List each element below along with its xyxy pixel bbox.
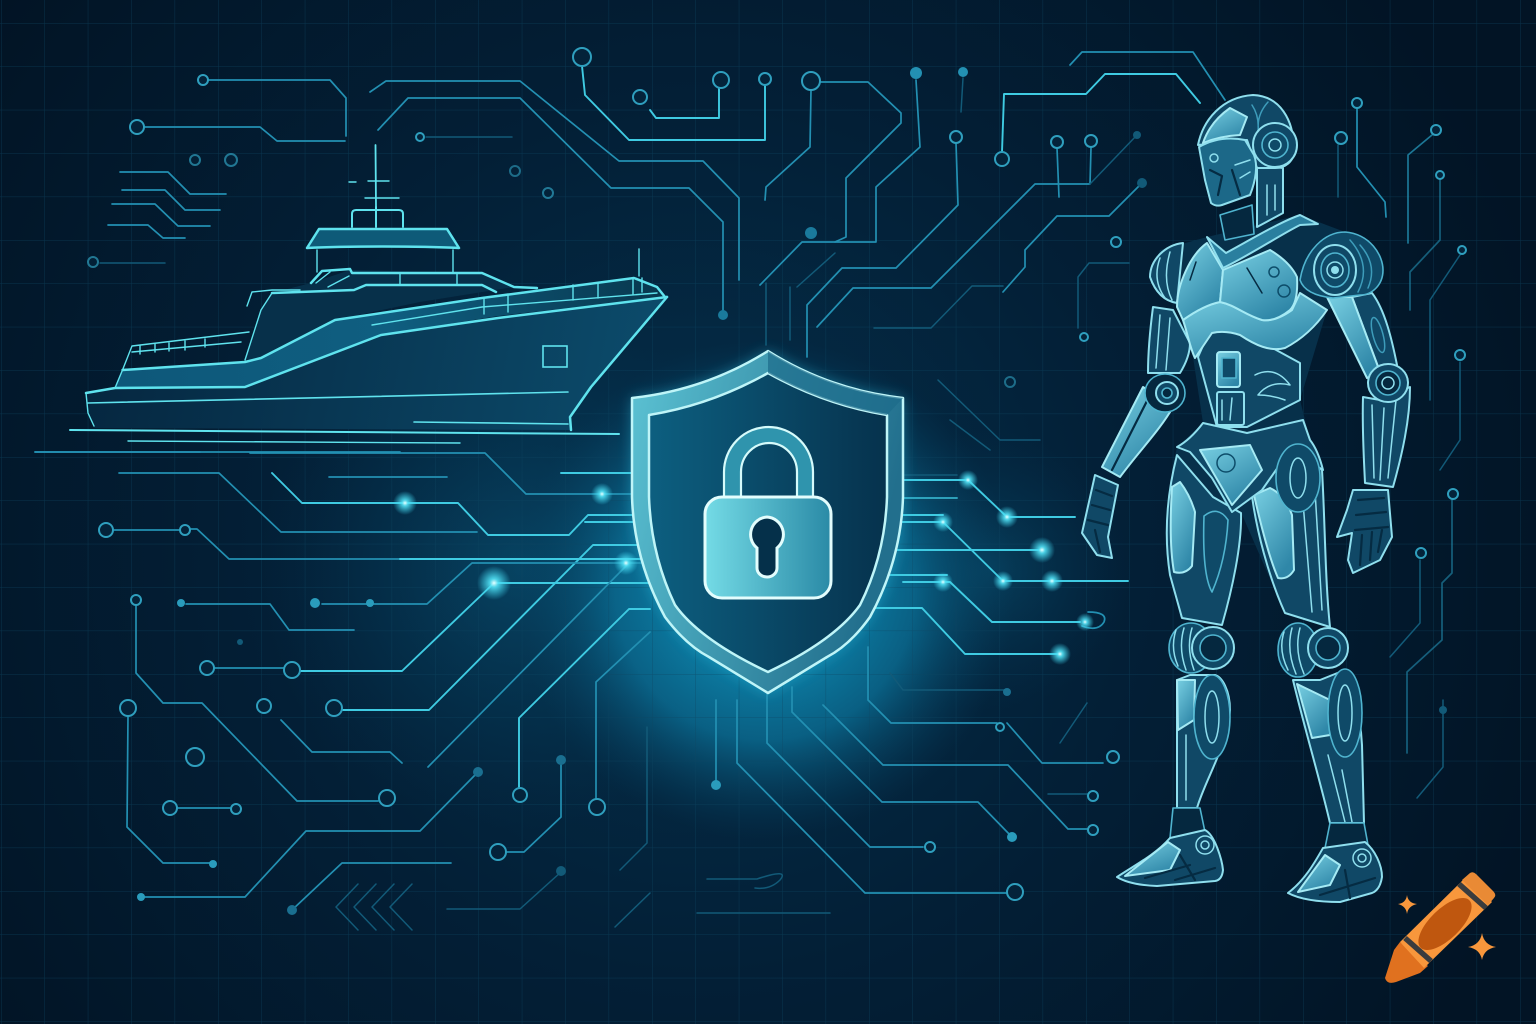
glowing sparks on traces xyxy=(393,470,1094,665)
ear disc xyxy=(1253,123,1297,167)
crayon cap xyxy=(1462,872,1495,905)
ship bridge xyxy=(307,145,459,272)
robot dark backing silhouette xyxy=(1150,215,1383,627)
circuit nodes: lower centre xyxy=(711,489,1458,900)
right foot xyxy=(1288,842,1382,902)
face xyxy=(1199,139,1256,206)
robot collar xyxy=(1207,215,1318,268)
padlock keyhole xyxy=(751,517,783,577)
circuit traces: top xyxy=(100,52,1460,470)
circuit traces: lower centre and right xyxy=(697,475,1452,913)
right shin xyxy=(1293,670,1364,823)
shield inner panel xyxy=(649,373,887,672)
right pectoral xyxy=(1220,250,1297,320)
chest lower band xyxy=(1183,293,1327,358)
crayon logo xyxy=(1385,872,1496,983)
left pectoral xyxy=(1177,243,1223,320)
left shoulder xyxy=(1150,243,1183,303)
ship deck outlines xyxy=(35,249,667,452)
ship hull xyxy=(86,297,667,430)
right ankle xyxy=(1325,823,1368,848)
ship superstructure xyxy=(245,270,514,360)
robot right hand xyxy=(1337,490,1392,573)
right shoulder xyxy=(1300,232,1383,298)
robot left hand xyxy=(1082,475,1118,558)
robot left arm xyxy=(1102,307,1190,477)
right thigh xyxy=(1250,445,1330,627)
left ankle xyxy=(1170,808,1205,838)
crayon body xyxy=(1400,878,1492,968)
ship porthole xyxy=(543,346,567,367)
robot feet xyxy=(1117,808,1382,902)
sparkle large xyxy=(1468,933,1496,960)
sparkle small xyxy=(1398,895,1417,914)
left thigh xyxy=(1167,455,1241,625)
crayon tip xyxy=(1385,942,1428,983)
padlock body xyxy=(705,497,831,598)
robot head xyxy=(1198,95,1297,206)
crayon stripes xyxy=(1405,884,1486,961)
robot right arm xyxy=(1327,293,1410,487)
padlock shackle xyxy=(724,427,813,497)
circuit nodes: lower left xyxy=(99,523,605,915)
right knee xyxy=(1278,623,1318,677)
right shoulder disc xyxy=(1314,245,1356,295)
robot pelvis xyxy=(1177,420,1323,512)
shield ridge xyxy=(768,351,903,415)
robot neck xyxy=(1220,165,1283,240)
circuit traces: lower left xyxy=(35,452,650,930)
left knee xyxy=(1169,623,1213,673)
robot shoulders and torso xyxy=(1150,232,1383,358)
left shin xyxy=(1177,675,1230,808)
padlock xyxy=(705,427,831,598)
left foot xyxy=(1117,830,1223,886)
robot abdomen xyxy=(1198,330,1300,427)
robot xyxy=(1082,95,1410,902)
crayon oval xyxy=(1410,890,1480,958)
shield halo xyxy=(632,351,903,693)
ship band xyxy=(115,278,665,387)
shield outer ring xyxy=(632,351,903,693)
ship xyxy=(35,145,667,452)
robot legs xyxy=(1167,445,1364,823)
circuit nodes: top xyxy=(88,48,1466,387)
helmet xyxy=(1198,95,1294,168)
shield xyxy=(632,351,903,693)
